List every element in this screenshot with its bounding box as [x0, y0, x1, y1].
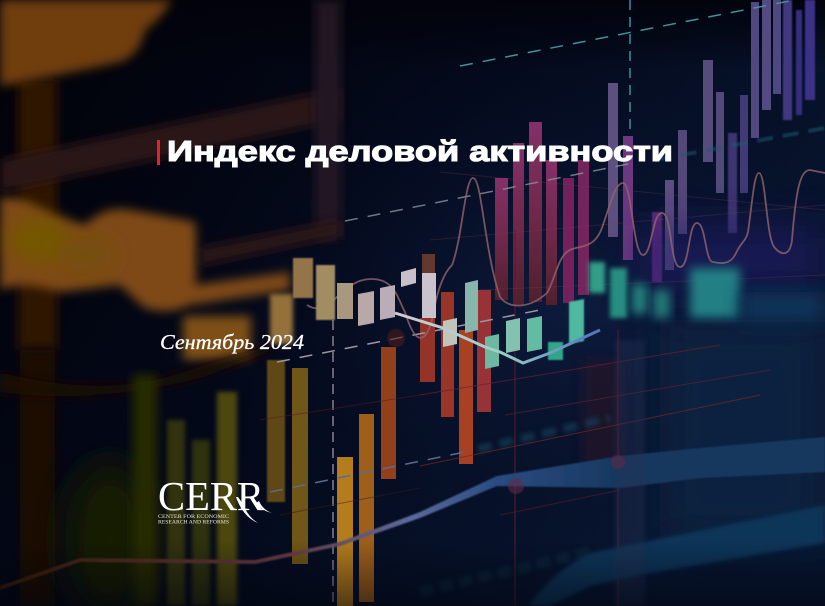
- candlesticks: [316, 254, 825, 369]
- blurred orange chart elements, left: [0, 0, 341, 606]
- bars: red and magenta: [420, 122, 622, 470]
- grid nodes: [387, 329, 625, 494]
- blue trend line: [0, 437, 825, 590]
- title accent bar: [157, 140, 160, 165]
- date: Сентябрь 2024: [160, 330, 305, 354]
- grid lines: [260, 0, 825, 606]
- smooth line chart: [307, 170, 825, 338]
- bars: olive and orange: [133, 347, 396, 606]
- logo: CERR: CERR: [158, 473, 265, 519]
- lower blue band: [528, 505, 825, 606]
- bottom vignette: [0, 540, 825, 606]
- bars: purple: [608, 0, 825, 290]
- logo: CERR: RESEARCH AND REFORMS: [158, 520, 229, 526]
- logo: CERR: CENTER FOR ECONOMIC: [158, 514, 229, 520]
- faint vertical band: [615, 340, 645, 606]
- price line: [395, 313, 600, 363]
- title: Индекс деловой активности: [167, 136, 673, 168]
